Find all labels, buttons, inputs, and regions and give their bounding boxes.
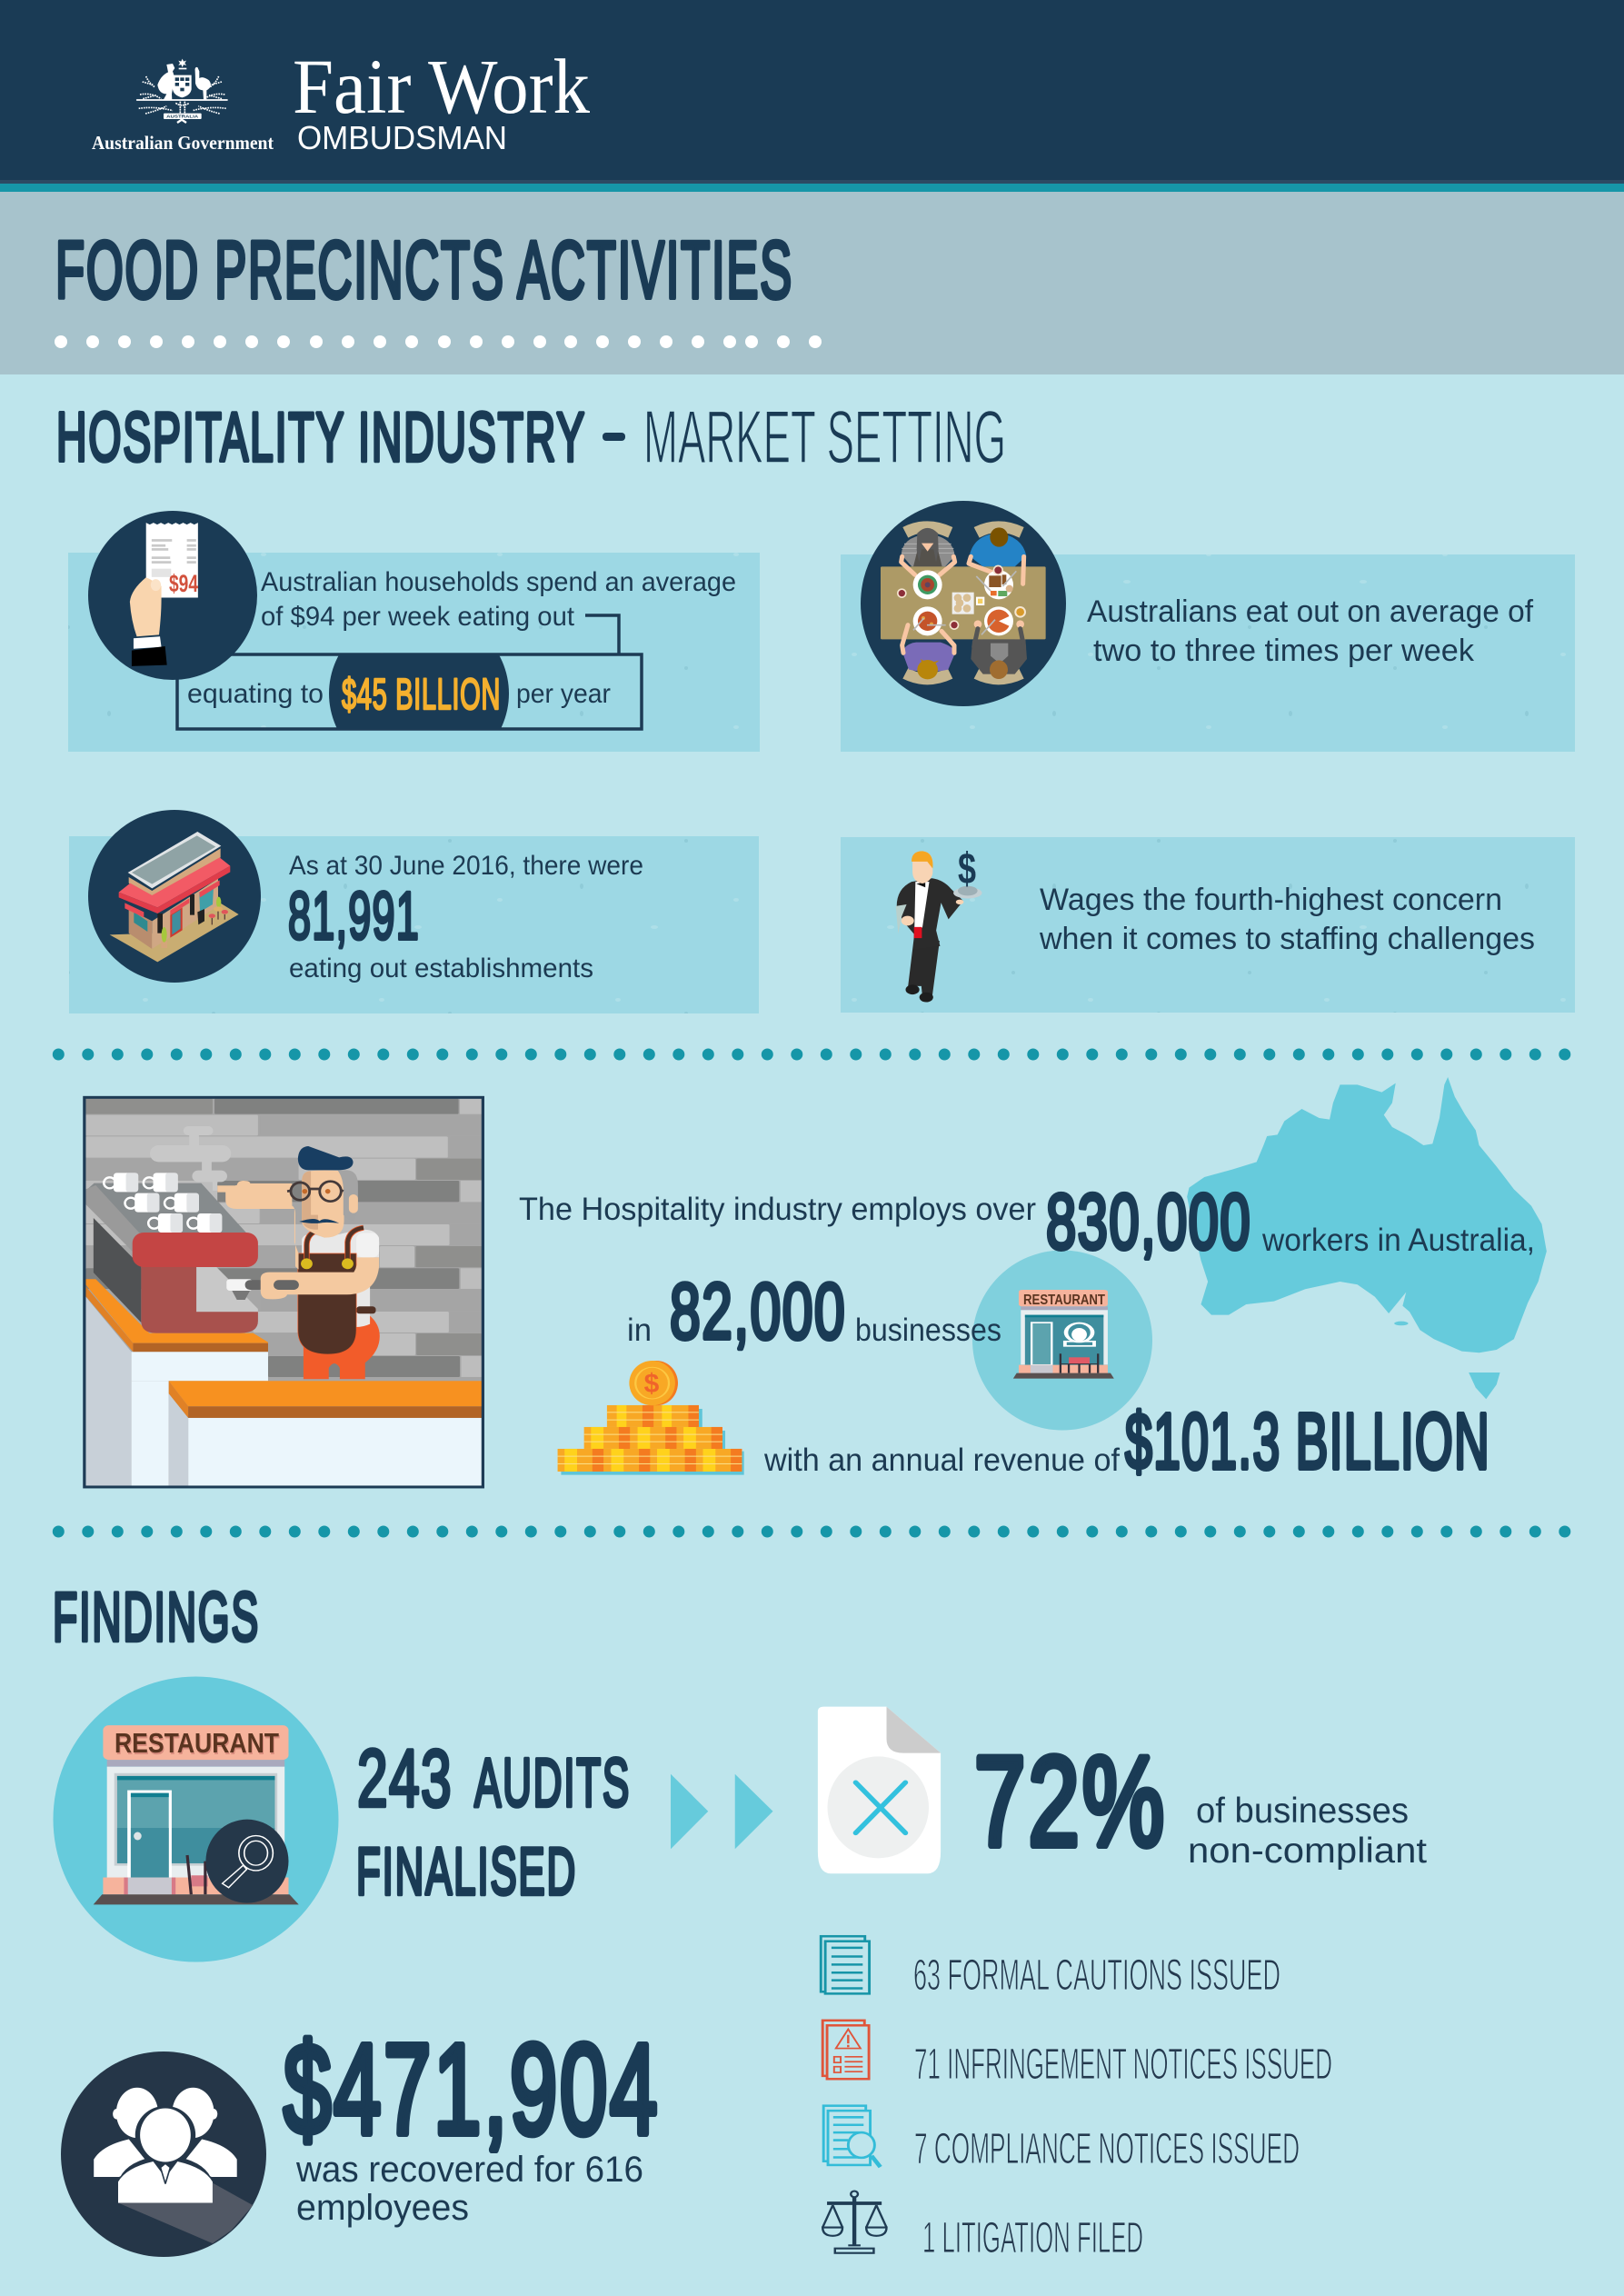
stat: money recovered	[284, 2017, 660, 2228]
icon: hand holding receipt: $94	[169, 570, 198, 597]
icon: restaurant audit: RESTAURANT	[115, 1729, 280, 1761]
stat: money recovered: $471,904	[284, 2017, 660, 2161]
connector box	[175, 614, 643, 731]
logo: Fair Work: Fair Work	[293, 43, 590, 130]
text: establishments: 81,991	[288, 878, 420, 953]
panel: wages	[841, 837, 1575, 1013]
stat: money recovered: was recovered for 616	[295, 2150, 643, 2190]
text: eating out frequency	[1087, 594, 1534, 668]
icon: formal cautions	[821, 1936, 870, 1993]
text: compliance notices: 7 COMPLIANCE NOTICES ISSUED	[914, 2125, 1300, 2173]
icon: restaurant audit	[53, 1676, 338, 1962]
stat: 72 percent non-compliant: of businesses	[1196, 1792, 1409, 1831]
text: wages: Wages the fourth-highest concern	[1040, 883, 1502, 917]
icon: restaurant audit: RESTAURANT	[115, 1727, 279, 1759]
text: industry statistics: The Hospitality industry employs over	[519, 1192, 1036, 1227]
text: wages: when it comes to staffing challenges	[1039, 922, 1535, 956]
text: litigation filed: 1 LITIGATION FILED	[922, 2214, 1143, 2262]
text: audits finalised: AUDITS	[474, 1744, 631, 1821]
text: eating out frequency: two to three times per week	[1093, 634, 1475, 668]
arrows	[671, 1774, 773, 1849]
text: industry statistics: businesses	[855, 1313, 1001, 1348]
text: industry statistics: in	[627, 1313, 652, 1348]
icon: coin stack: $	[644, 1369, 660, 1399]
text: industry statistics: with an annual revenue of	[763, 1442, 1120, 1478]
text: household spend	[187, 567, 736, 719]
icon: isometric restaurant building	[88, 810, 261, 983]
icon: restaurant in circle: RESTAURANT	[1023, 1293, 1105, 1308]
title band	[0, 192, 1624, 374]
icon: restaurant in circle	[972, 1251, 1152, 1431]
text: establishments: As at 30 June 2016, there were	[289, 851, 643, 881]
icon: non-compliant document	[818, 1707, 941, 1873]
icon: infringement notices	[822, 2021, 869, 2079]
panel: eating out frequency	[841, 501, 1575, 752]
text: formal cautions: 63 FORMAL CAUTIONS ISSUED	[913, 1952, 1280, 2000]
stat: money recovered: employees	[296, 2188, 469, 2228]
text: industry statistics: 82,000	[670, 1267, 846, 1356]
text: establishments	[288, 851, 643, 983]
text: eating out frequency: Australians eat out on average of	[1087, 594, 1534, 629]
text: audits finalised	[356, 1732, 631, 1909]
text: household spend: equating to	[187, 679, 324, 709]
icon: scales of justice	[822, 2191, 886, 2253]
text: audits finalised: FINALISED	[356, 1833, 577, 1909]
text: household spend: per year	[516, 679, 611, 709]
icon: hand holding receipt	[88, 511, 257, 680]
logo: Australian coat of arms	[137, 59, 227, 123]
text: wages	[1039, 883, 1535, 956]
icon: coin stack	[558, 1361, 744, 1475]
text: audits finalised: 243	[357, 1732, 453, 1823]
heading: findings: FINDINGS	[53, 1579, 260, 1656]
section heading: hospitality industry market setting: HOSPITALITY INDUSTRY	[56, 399, 586, 476]
title: FOOD PRECINCTS ACTIVITIES	[55, 224, 793, 314]
text: household spend: Australian households spend an average	[261, 567, 736, 597]
icon: compliance notices	[823, 2106, 881, 2167]
text: industry statistics	[519, 1178, 1535, 1485]
section heading: hospitality industry market setting: MARKET SETTING	[643, 394, 1006, 479]
map: Australia	[1187, 1077, 1547, 1399]
text: industry statistics: workers in Australia,	[1261, 1223, 1535, 1258]
icon: employees group	[61, 2051, 266, 2257]
icon: table of diners	[861, 501, 1066, 706]
stat: 72 percent non-compliant: 72%	[974, 1730, 1167, 1872]
text: household spend: $45 BILLION	[342, 671, 501, 719]
header bar	[0, 0, 1624, 192]
panel: establishments	[69, 810, 759, 1013]
panel: household spend	[68, 511, 760, 778]
logo: Australian coat of arms: AUSTRALIA	[166, 115, 199, 120]
text: establishments: eating out establishments	[289, 953, 593, 983]
illustration: barista at coffee machine	[85, 1097, 483, 1487]
icon: waiter with dollar tray	[896, 845, 982, 1003]
logo: Australian Government text: Australian Government	[92, 132, 274, 154]
stat: 72 percent non-compliant	[974, 1730, 1427, 1872]
stat: 72 percent non-compliant: non-compliant	[1188, 1832, 1427, 1871]
logo: Ombudsman: OMBUDSMAN	[297, 119, 507, 156]
icon: waiter with dollar tray: $	[958, 845, 976, 893]
text: household spend: of $94 per week eating out	[261, 602, 575, 632]
text: industry statistics: 830,000	[1046, 1178, 1251, 1265]
